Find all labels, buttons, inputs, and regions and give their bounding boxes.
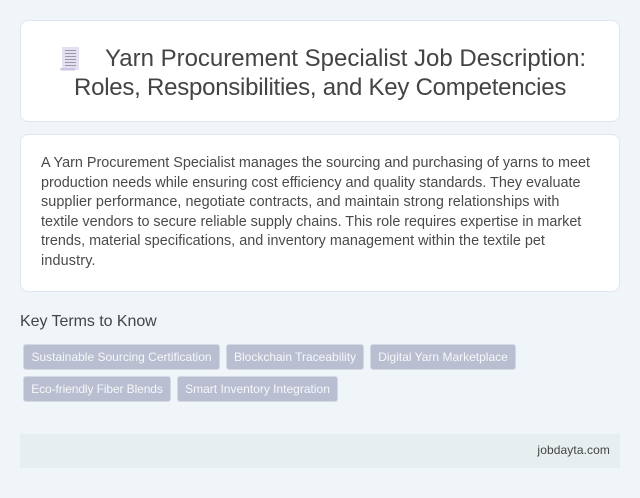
footer bar	[20, 434, 620, 468]
title	[74, 45, 586, 101]
footer text: jobdayta.com	[537, 443, 610, 457]
heading: key terms: Key Terms to Know	[20, 313, 157, 330]
title: Yarn Procurement Specialist Job Description:	[105, 45, 586, 72]
text block: description: industry.	[41, 252, 96, 268]
text block: description: textile vendors to secure reliable supply chains. This role requires expertise in market	[41, 214, 581, 230]
tag: eco-friendly: Eco-friendly Fiber Blends	[31, 382, 163, 396]
tag: blockchain: Blockchain Traceability	[234, 350, 356, 364]
text block: description: production needs while ensuring cost efficiency and quality standards. They evaluate	[41, 174, 580, 190]
text block: description: supplier performance, negotiate contracts, and maintain strong relationships with	[41, 194, 559, 210]
icon: paper scroll	[60, 47, 79, 70]
tag: smart inventory: Smart Inventory Integration	[185, 382, 330, 396]
tag: sustainable sourcing: Sustainable Sourcing Certification	[31, 350, 212, 364]
tag list: key terms	[23, 344, 516, 402]
title: Roles, Responsibilities, and Key Competencies	[74, 74, 566, 101]
tag: smart inventory	[177, 376, 338, 402]
panel: description card	[20, 134, 620, 292]
tag: eco-friendly	[23, 376, 171, 402]
tag: blockchain	[226, 344, 364, 370]
text block: description	[41, 155, 590, 268]
tag: sustainable sourcing	[23, 344, 220, 370]
text block: description: A Yarn Procurement Specialist manages the sourcing and purchasing of yarns to meet	[41, 155, 590, 171]
panel: title card	[20, 20, 620, 122]
tag: digital yarn: Digital Yarn Marketplace	[378, 350, 508, 364]
tag: digital yarn	[370, 344, 516, 370]
text block: description: trends, material specifications, and inventory management within the textile pet	[41, 233, 545, 249]
